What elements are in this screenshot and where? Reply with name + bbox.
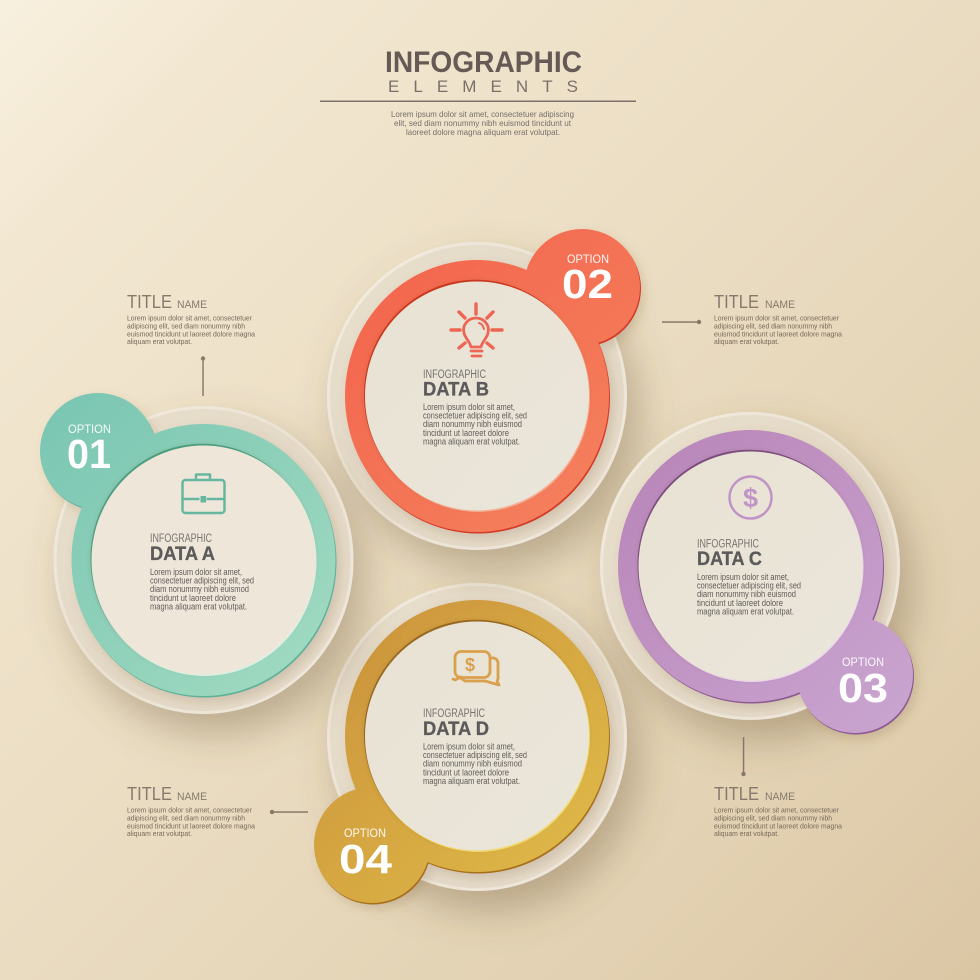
title: INFOGRAPHIC — [385, 46, 582, 79]
data B text: magna aliquam erat volutpat. — [423, 436, 520, 446]
note: bottom right: euismod tincidunt ut laoreet dolore magna — [714, 822, 843, 830]
icon: light bulb — [451, 304, 502, 356]
icon: chat with dollar: $ — [465, 655, 475, 675]
note: bottom right: TITLE — [714, 784, 759, 804]
badge text 04: 04 — [339, 836, 392, 882]
note: top left: TITLE — [127, 292, 172, 312]
ring and badge B — [345, 229, 641, 534]
data D label: DATA D — [423, 718, 489, 740]
header description — [391, 109, 574, 137]
note: bottom right: Lorem ipsum dolor sit amet, consectetuer — [714, 806, 839, 814]
data B label: DATA B — [423, 378, 489, 400]
data A text: consectetuer adipiscing elit, sed — [150, 576, 254, 586]
badge text 03: OPTION — [842, 655, 884, 669]
data D text: magna aliquam erat volutpat. — [423, 776, 520, 786]
panel: data A — [40, 393, 354, 714]
badge text 04: OPTION — [344, 826, 386, 840]
connector: bottom left — [270, 810, 308, 814]
data A text: Lorem ipsum dolor sit amet, — [150, 567, 242, 577]
plate D — [327, 583, 627, 891]
header description: Lorem ipsum dolor sit amet, consectetuer adipiscing — [391, 109, 574, 119]
data B text: tincidunt ut laoreet dolore — [423, 428, 509, 438]
note: bottom right — [714, 784, 843, 838]
note: bottom left — [127, 784, 256, 838]
note: bottom right: NAME — [765, 791, 795, 803]
data C text: consectetuer adipiscing elit, sed — [697, 580, 801, 590]
data C label — [697, 538, 762, 570]
badge text 03: 03 — [838, 665, 888, 711]
note: top left: adipiscing elit, sed diam nonummy nibh — [127, 322, 245, 330]
connector: top right — [662, 320, 701, 324]
note: bottom left: NAME — [177, 791, 207, 803]
badge text 02: OPTION — [567, 252, 609, 266]
note: top right: NAME — [765, 299, 795, 311]
data D label — [423, 708, 489, 740]
badge text 01: 01 — [67, 431, 111, 477]
data D text: diam nonummy nibh euismod — [423, 758, 522, 768]
icon: chat with dollar — [453, 652, 499, 685]
data D text: tincidunt ut laoreet dolore — [423, 768, 509, 778]
badge text 01: OPTION — [68, 422, 111, 436]
data B label: INFOGRAPHIC — [423, 369, 486, 381]
data C label: INFOGRAPHIC — [697, 538, 759, 550]
icon: dollar coin: $ — [743, 483, 758, 513]
note: top left — [127, 292, 256, 346]
data A text — [150, 567, 254, 612]
note: top right — [714, 292, 843, 346]
note: top left: Lorem ipsum dolor sit amet, consectetuer — [127, 314, 252, 322]
data C text — [697, 572, 801, 616]
plate B — [327, 242, 627, 550]
plate A — [54, 406, 354, 714]
icon: briefcase — [182, 474, 224, 513]
subtitle: ELEMENTS — [388, 77, 578, 96]
panel: data C — [600, 412, 914, 734]
data D label: INFOGRAPHIC — [423, 708, 485, 720]
header description: elit, sed diam nonummy nibh euismod tincidunt ut — [394, 118, 572, 128]
data B text: consectetuer adipiscing elit, sed — [423, 410, 527, 420]
note: top left: NAME — [177, 299, 207, 311]
disc A — [90, 444, 316, 676]
data B text — [423, 402, 527, 446]
icon: dollar coin — [730, 476, 772, 518]
data C text: magna aliquam erat volutpat. — [697, 606, 794, 616]
data B text: Lorem ipsum dolor sit amet, — [423, 402, 515, 412]
data C text: diam nonummy nibh euismod — [697, 589, 796, 599]
data D text — [423, 742, 527, 786]
header description: laoreet dolore magna aliquam erat volutpat. — [406, 127, 560, 137]
data C text: Lorem ipsum dolor sit amet, — [697, 572, 789, 582]
note: top left: aliquam erat volutpat. — [127, 337, 192, 346]
data A label: DATA A — [150, 543, 215, 565]
panel: data B — [327, 229, 641, 550]
note: bottom right: adipiscing elit, sed diam nonummy nibh — [714, 814, 832, 822]
note: bottom left: aliquam erat volutpat. — [127, 829, 192, 838]
note: bottom right: aliquam erat volutpat. — [714, 829, 779, 838]
note: top right: TITLE — [714, 292, 759, 312]
badge text 02: 02 — [562, 261, 613, 307]
data D text: Lorem ipsum dolor sit amet, — [423, 742, 515, 752]
note: top right: adipiscing elit, sed diam nonummy nibh — [714, 322, 832, 330]
panel: data D — [314, 583, 627, 904]
data B text: diam nonummy nibh euismod — [423, 419, 522, 429]
note: top right: aliquam erat volutpat. — [714, 337, 779, 346]
note: bottom left: Lorem ipsum dolor sit amet, consectetuer — [127, 806, 252, 814]
data C label: DATA C — [697, 548, 762, 570]
data A label — [150, 533, 215, 565]
data A text: magna aliquam erat volutpat. — [150, 602, 247, 612]
note: top left: euismod tincidunt ut laoreet dolore magna — [127, 330, 256, 338]
data C text: tincidunt ut laoreet dolore — [697, 598, 783, 608]
connector: top left — [201, 356, 205, 396]
data A text: tincidunt ut laoreet dolore — [150, 593, 236, 603]
note: bottom left: euismod tincidunt ut laoreet dolore magna — [127, 822, 256, 830]
ring and badge C — [618, 430, 914, 734]
header — [320, 46, 636, 137]
note: top right: Lorem ipsum dolor sit amet, consectetuer — [714, 314, 839, 322]
data D text: consectetuer adipiscing elit, sed — [423, 750, 527, 760]
header rule — [320, 100, 636, 102]
note: top right: euismod tincidunt ut laoreet dolore magna — [714, 330, 843, 338]
data A text: diam nonummy nibh euismod — [150, 584, 249, 594]
note: bottom left: adipiscing elit, sed diam nonummy nibh — [127, 814, 245, 822]
connector: bottom right — [741, 737, 746, 776]
disc D — [364, 620, 590, 852]
data B label — [423, 369, 489, 400]
note: bottom left: TITLE — [127, 784, 172, 804]
plate C — [600, 412, 900, 720]
ring and badge A — [40, 393, 336, 698]
disc B — [364, 280, 590, 512]
ring and badge D — [314, 600, 610, 904]
data A label: INFOGRAPHIC — [150, 533, 212, 545]
disc C — [638, 450, 864, 682]
